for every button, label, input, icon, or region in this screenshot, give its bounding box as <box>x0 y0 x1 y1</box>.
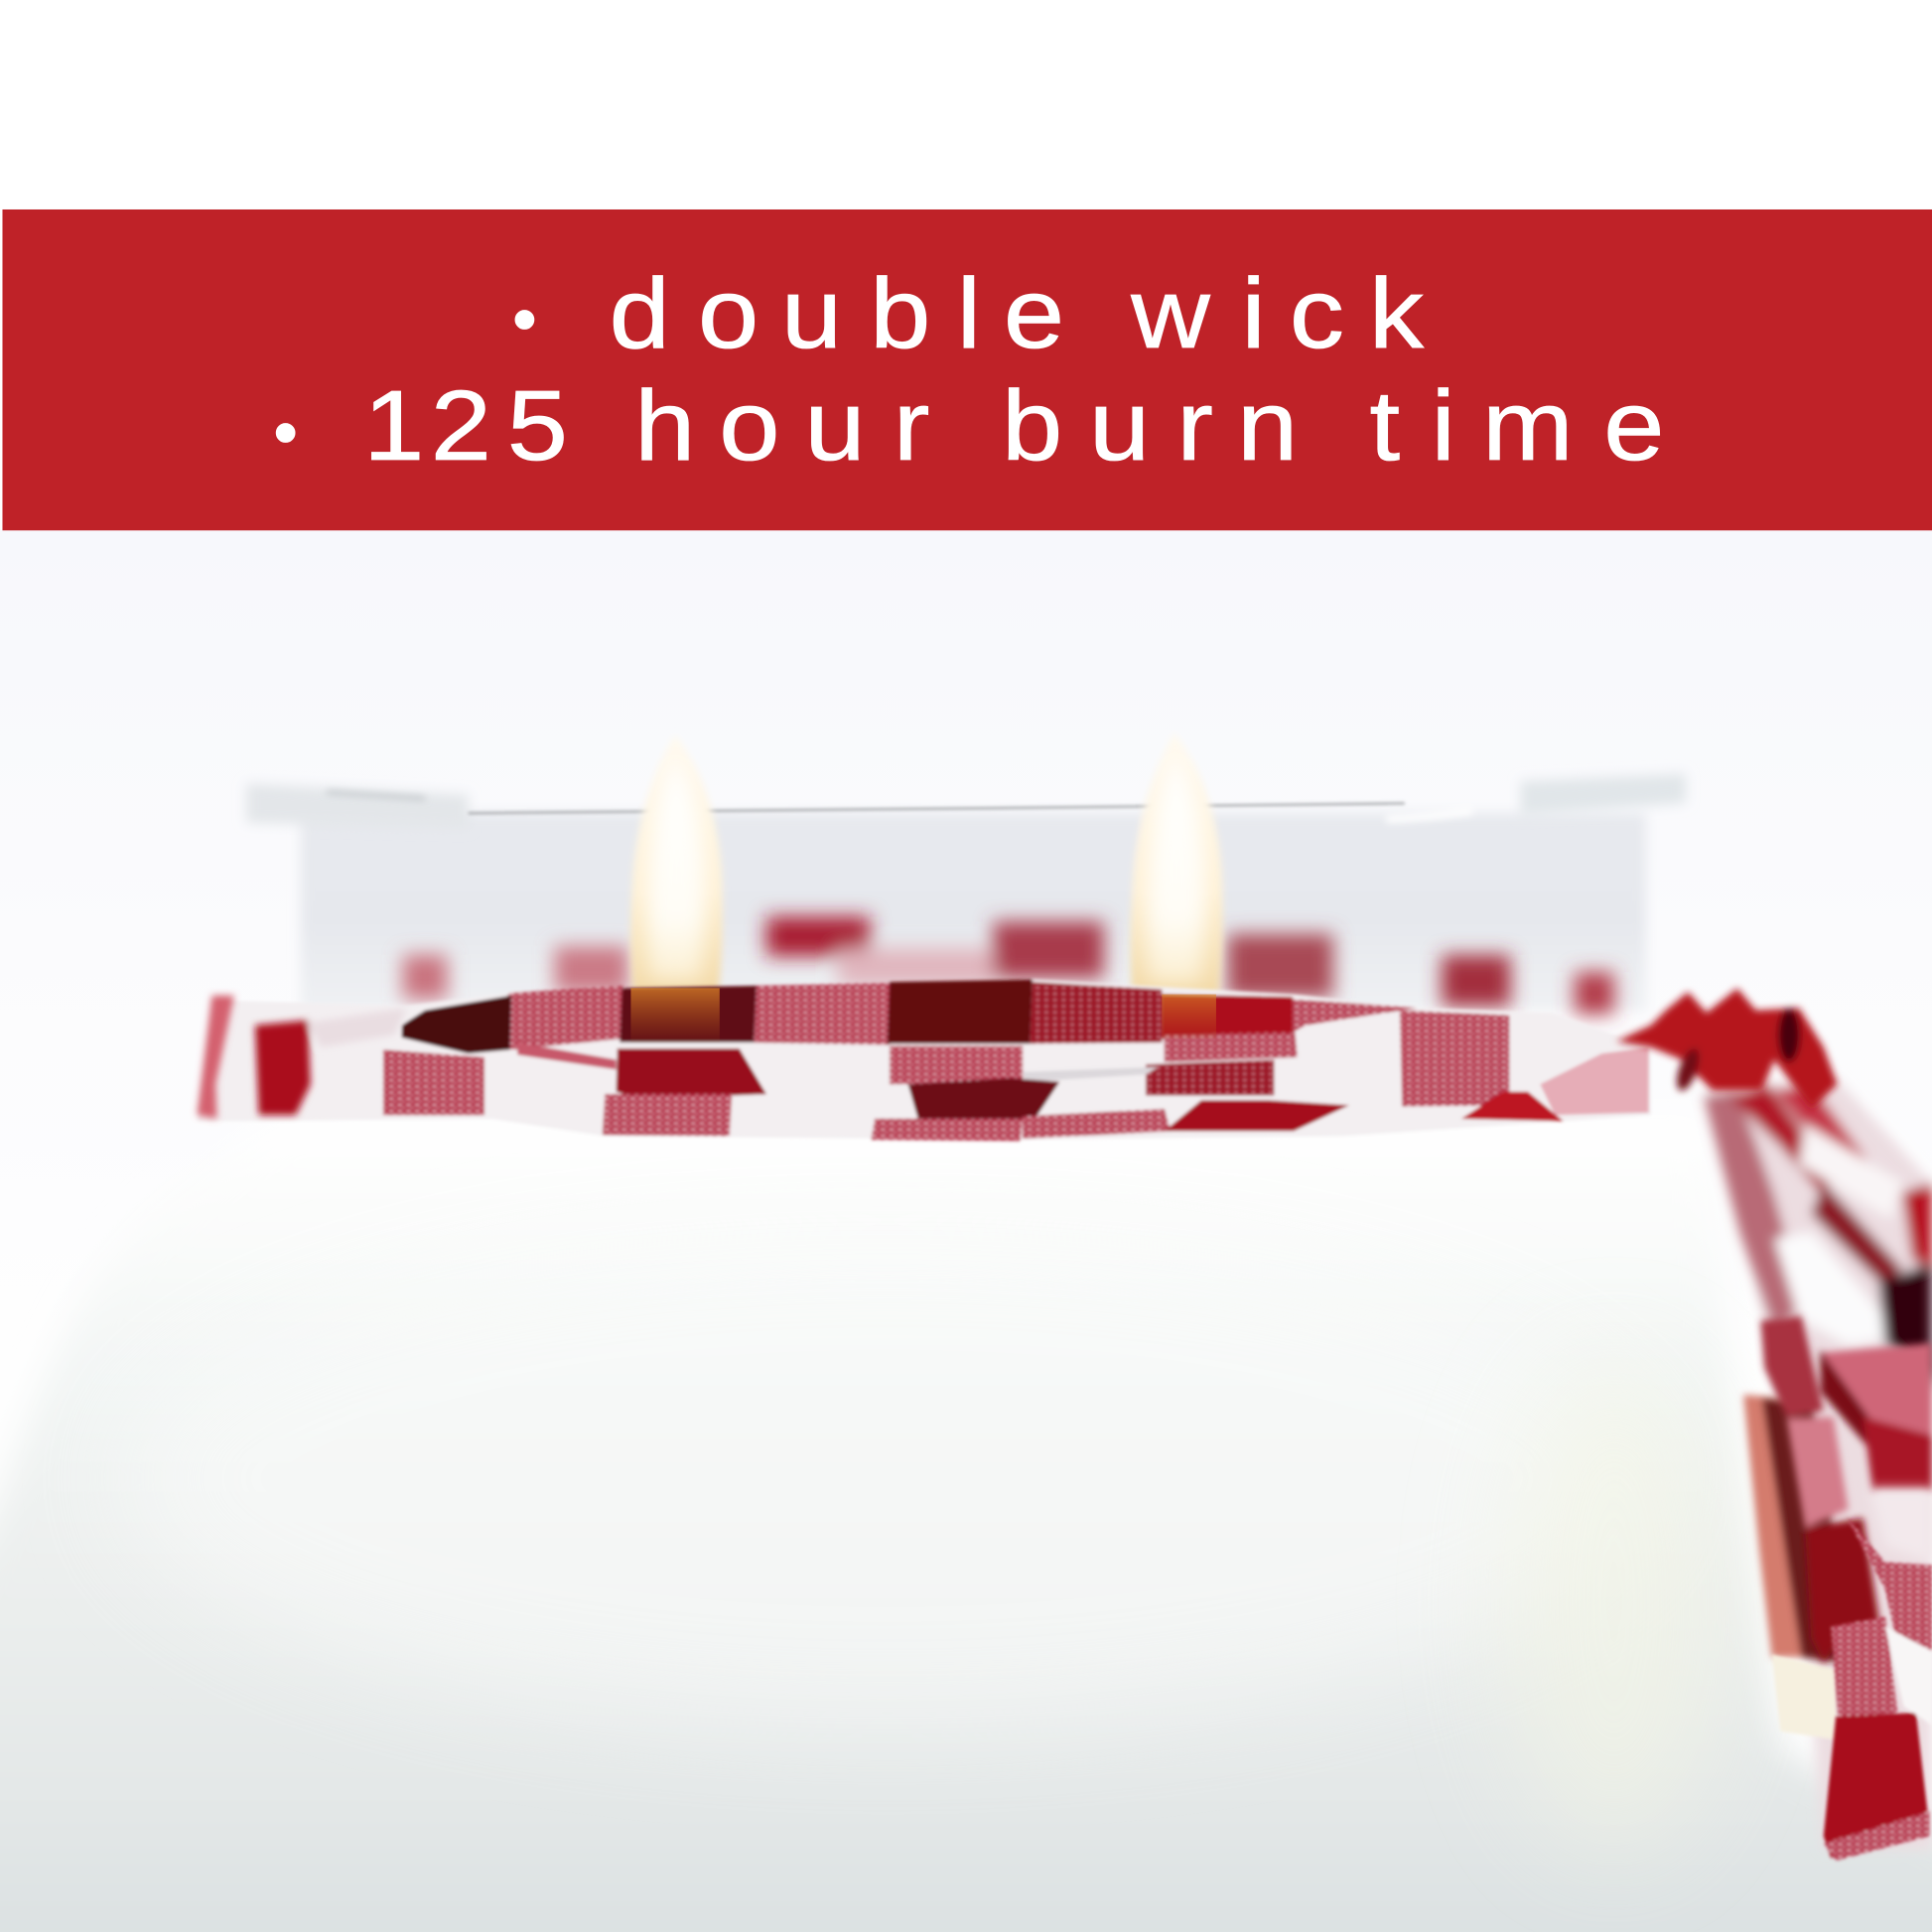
feature: 125 hour burn time: 125 hour burn time <box>363 370 1664 482</box>
lower row checks <box>603 1048 1564 1141</box>
cream tail end <box>1772 1655 1836 1739</box>
bullet: double wick: • <box>512 280 537 357</box>
photo backdrop <box>0 530 1932 1932</box>
photo: candle jar with burning wicks and gingham ribbon <box>0 530 1932 1932</box>
ribbon flame reflection <box>630 988 1216 1042</box>
jar body <box>0 1115 1932 1932</box>
top row checks <box>402 980 1417 1053</box>
gingham ribbon around jar neck <box>198 980 1651 1141</box>
feature: double wick: double wick <box>610 259 1424 369</box>
ribbon seen through the glass <box>403 916 1614 1014</box>
middle row checks <box>383 1011 1649 1115</box>
ribbon knot <box>1616 988 1837 1109</box>
red feature banner <box>2 209 1932 530</box>
glass jar neck and rim <box>246 773 1686 1011</box>
salmon folded edge <box>1743 1395 1855 1663</box>
flame: left wick <box>630 735 723 993</box>
bullet: burn time: • <box>274 393 298 471</box>
front tail checks <box>1760 1315 1932 1663</box>
ribbon hanging tails <box>1704 1078 1932 1861</box>
frayed white threads <box>1869 1488 1932 1563</box>
ribbon left wrap, out of focus <box>198 996 407 1119</box>
rear tail, out of focus <box>1704 1078 1932 1849</box>
flame: right wick <box>1131 732 1222 996</box>
banner text <box>274 259 1664 482</box>
